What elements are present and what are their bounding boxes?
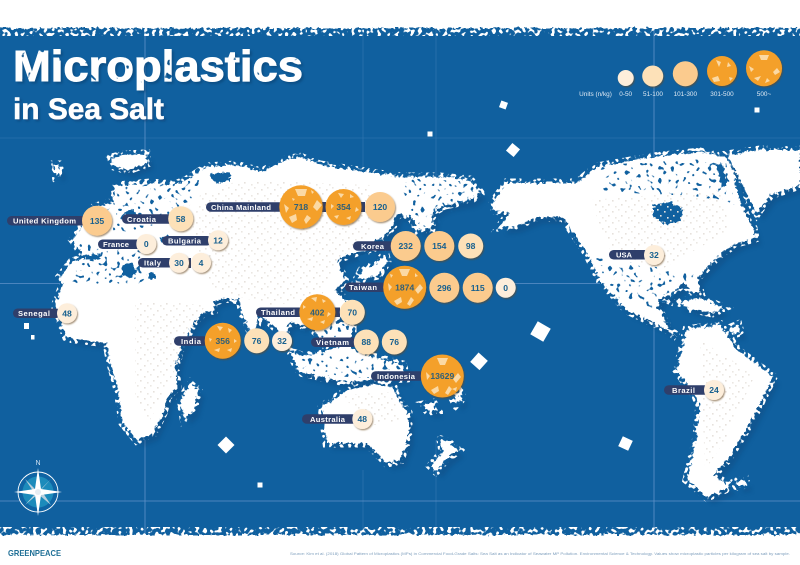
- compass rose: [14, 460, 62, 516]
- coastal speckle: [54, 150, 800, 497]
- country: United Kingdom: United Kingdom: [13, 217, 76, 226]
- country: Taiwan: 296: [437, 283, 452, 293]
- country: Vietnam: [311, 330, 407, 354]
- country: Thailand: Thailand: [261, 308, 295, 317]
- inland seas: [85, 163, 746, 279]
- country: Bulgaria: Bulgaria: [168, 237, 202, 246]
- logo: Greenpeace: GREENPEACE: [8, 548, 61, 558]
- ocean salt crystals: [24, 101, 760, 488]
- country: Senegal: 48: [62, 308, 72, 318]
- country: Taiwan: Taiwan: [349, 283, 377, 292]
- legend: Units (n/kg): [579, 91, 612, 98]
- country: Thailand: 402: [310, 308, 325, 318]
- country: Korea: 232: [399, 241, 413, 251]
- source note: Source: Kim et al. (2018) Global Pattern of Microplastics (MPs) in Commercial Food-Grade Salts: Sea Salt as an Indicator of Seawater MP Pollution. Environmental Science & Technology. Values show microplastic particles per kilogram of sea salt by sample.: [290, 552, 790, 556]
- country: France: France: [103, 240, 129, 249]
- country: Korea: 154: [432, 241, 447, 251]
- compass rose: N: [35, 460, 41, 467]
- bottom edge: salt border: [0, 527, 800, 565]
- country: Italy: 30: [174, 258, 184, 268]
- country: India: [174, 323, 292, 359]
- country: Taiwan: [345, 266, 516, 309]
- country: France: 0: [144, 239, 149, 249]
- country: Brazil: [664, 380, 724, 400]
- country: China Mainland: 354: [336, 202, 351, 212]
- country: Senegal: Senegal: [18, 309, 50, 318]
- world map: continents: [54, 150, 800, 497]
- country: Croatia: [122, 206, 193, 231]
- coastal erosion: blue flecks: [70, 158, 735, 380]
- country: Vietnam: 88: [362, 337, 371, 347]
- country: Italy: 4: [199, 258, 204, 268]
- country: India: 76: [252, 336, 262, 346]
- country: Brazil: 24: [709, 385, 719, 395]
- country: USA: [609, 245, 664, 265]
- top edge: salt border: [0, 0, 800, 36]
- country: Taiwan: 0: [503, 283, 508, 293]
- country: Australia: 48: [358, 414, 367, 424]
- country: USA: 32: [649, 250, 659, 260]
- country: Senegal: [13, 303, 77, 323]
- country: Taiwan: 1874: [395, 282, 414, 292]
- country: Croatia: 58: [176, 214, 186, 224]
- country: India: India: [181, 337, 202, 346]
- legend: 101-300: [674, 91, 697, 98]
- country: Brazil: Brazil: [672, 386, 695, 395]
- country: India: 356: [216, 336, 230, 346]
- country: Korea: 98: [466, 241, 476, 251]
- legend: [579, 50, 782, 98]
- country: Croatia: Croatia: [127, 215, 157, 224]
- country: Vietnam: Vietnam: [316, 338, 349, 347]
- country: France: [98, 234, 156, 254]
- country: Italy: [138, 253, 211, 273]
- country: Thailand: [256, 294, 365, 330]
- country: India: 32: [277, 336, 287, 346]
- country: Thailand: 70: [348, 308, 357, 318]
- country: Italy: Italy: [144, 258, 162, 268]
- subtitle: in Sea Salt: [13, 93, 164, 126]
- title: Microplastics: [13, 42, 303, 91]
- country: Korea: Korea: [361, 242, 385, 251]
- country: Bulgaria: [162, 230, 228, 250]
- country: Vietnam: 76: [390, 337, 399, 347]
- legend: 0-50: [619, 91, 633, 98]
- country: United Kingdom: [7, 206, 112, 236]
- legend: 51-100: [643, 91, 663, 98]
- legend: 301-500: [710, 91, 734, 98]
- country: Australia: [302, 409, 372, 429]
- country: Bulgaria: 12: [213, 236, 223, 246]
- country: Korea: [353, 231, 483, 261]
- country: China Mainland: [206, 185, 395, 229]
- country: China Mainland: 718: [294, 202, 308, 212]
- salt texture dots: [135, 180, 755, 470]
- land shadow: [60, 157, 800, 504]
- legend: 500~: [757, 91, 771, 98]
- country: China Mainland: 120: [373, 202, 387, 212]
- country: China Mainland: China Mainland: [211, 203, 271, 212]
- country: Australia: Australia: [310, 415, 346, 424]
- country: Taiwan: 115: [471, 283, 485, 293]
- country: Indonesia: [371, 354, 464, 398]
- country: USA: USA: [616, 251, 633, 260]
- country: United Kingdom: 135: [90, 216, 104, 226]
- country: Indonesia: Indonesia: [377, 372, 416, 381]
- country: Indonesia: 13629: [430, 371, 454, 381]
